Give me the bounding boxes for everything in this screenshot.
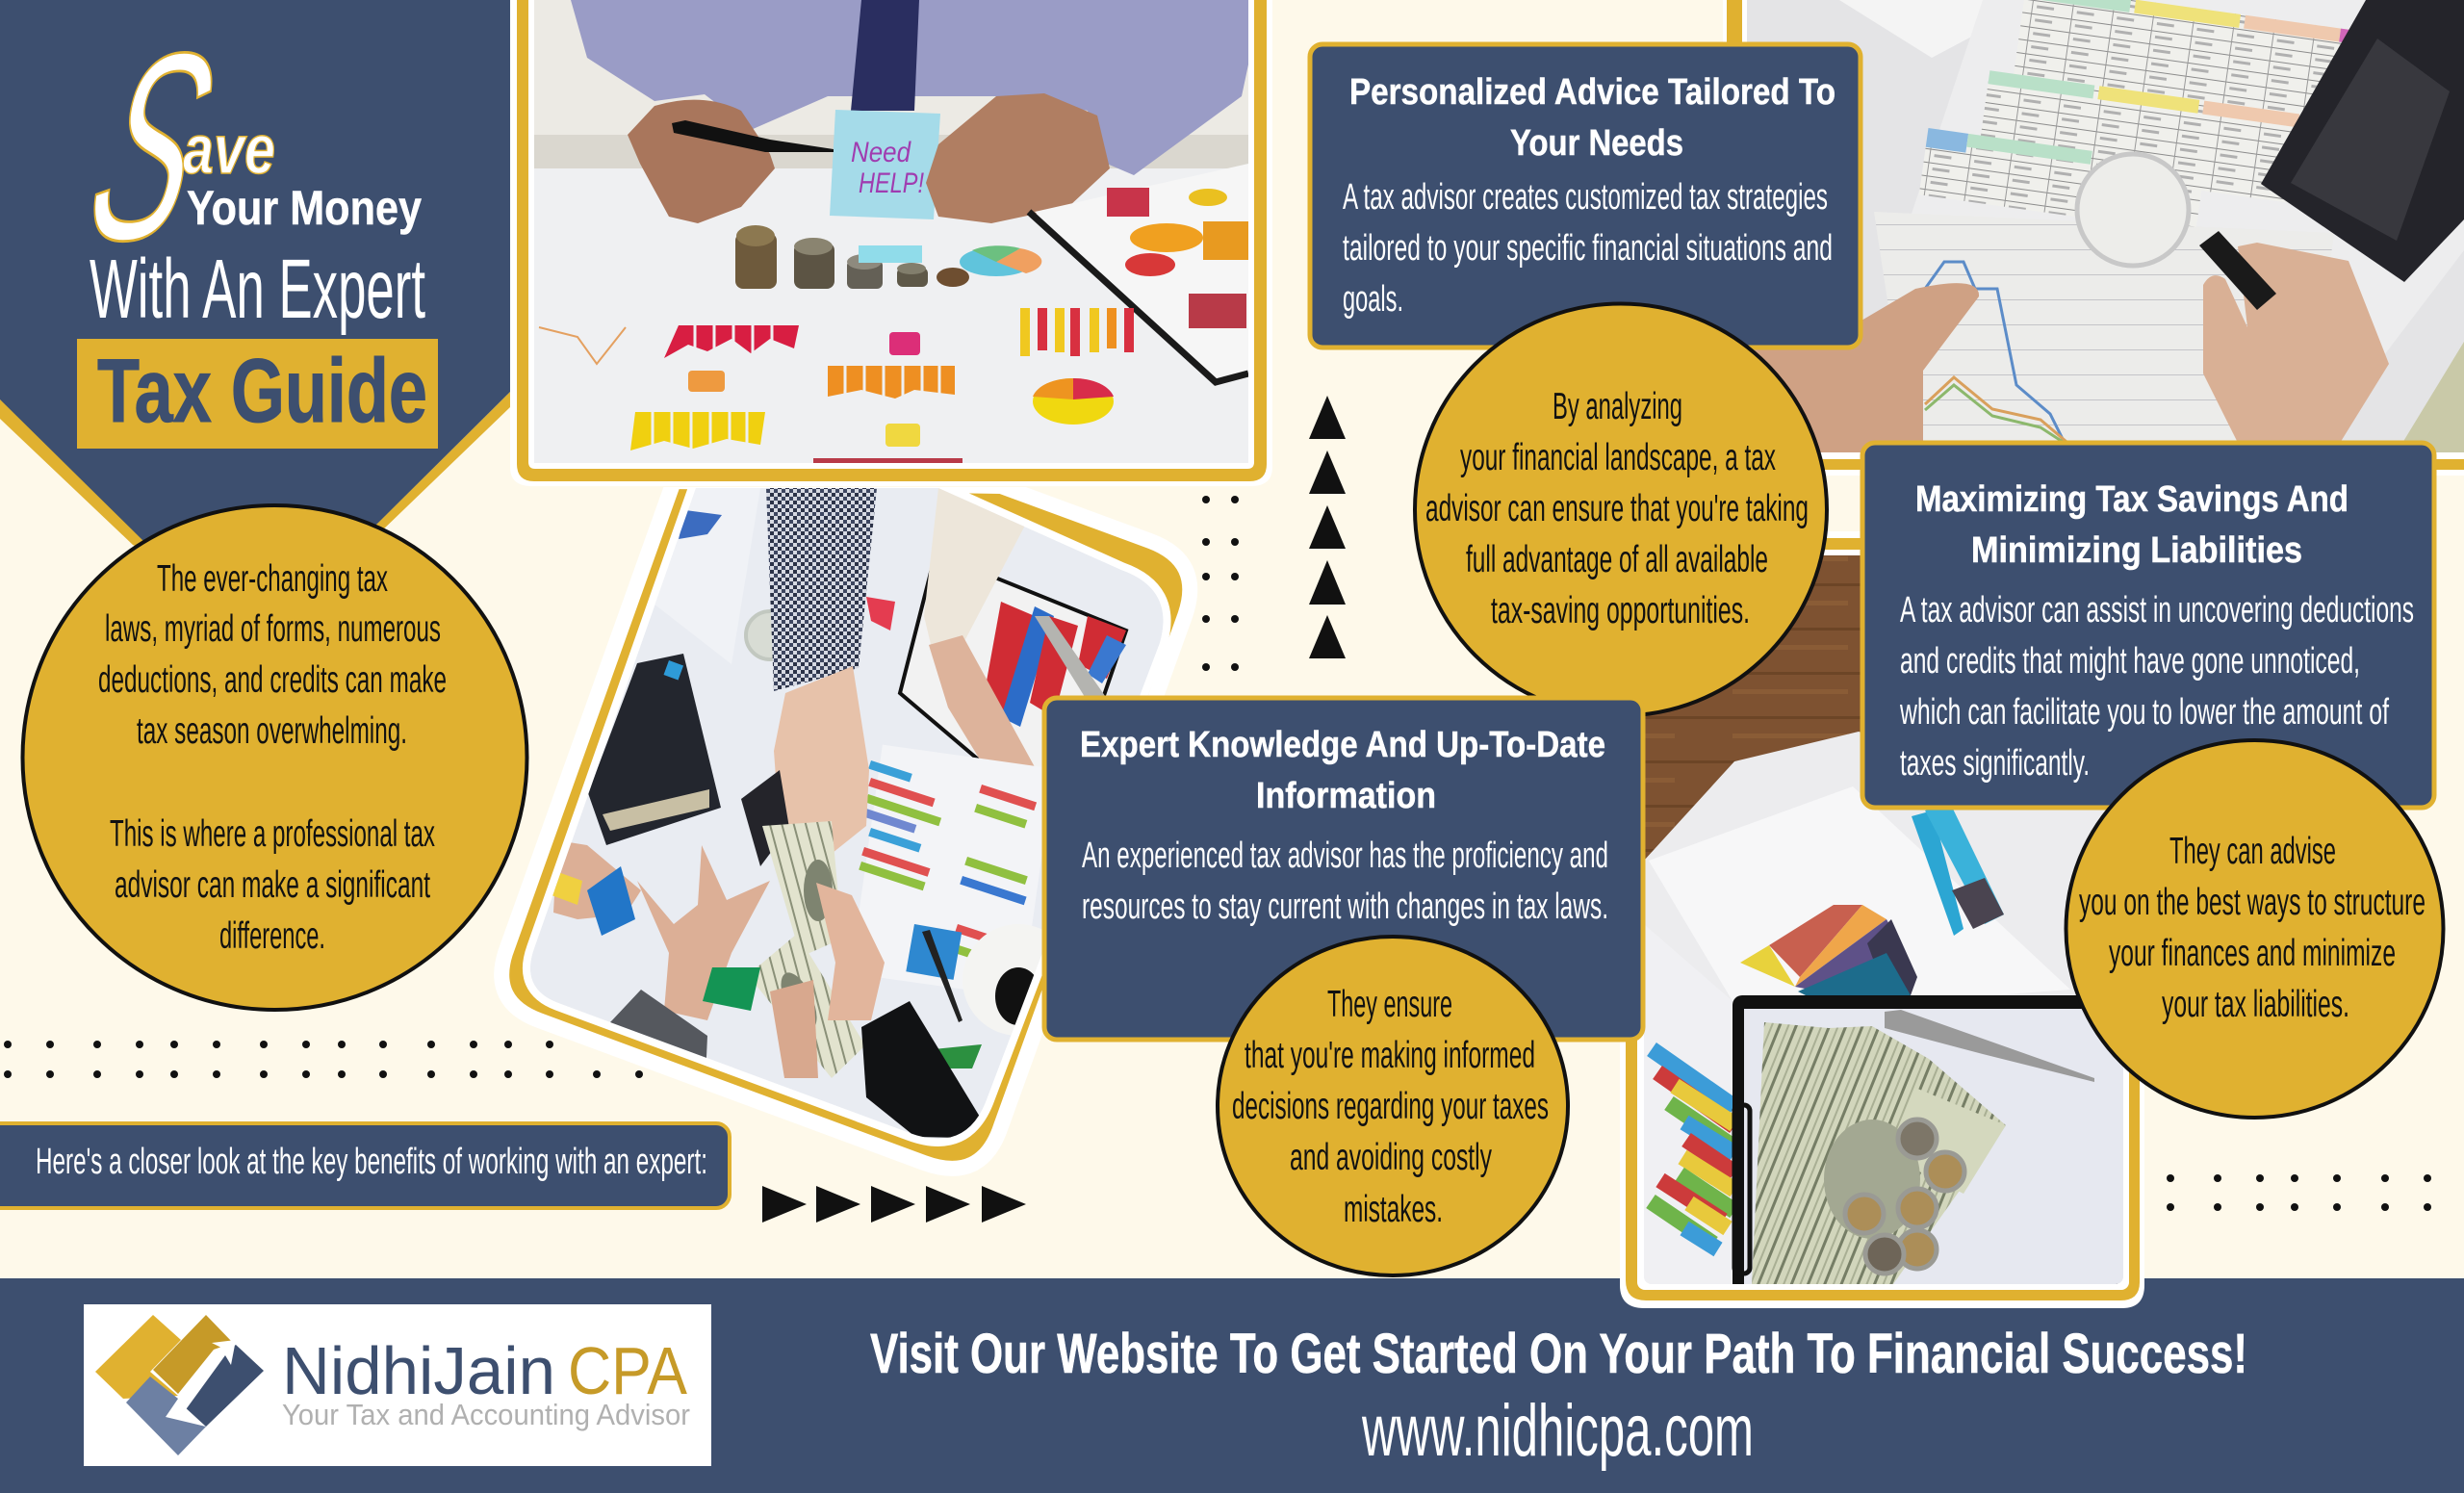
circle text: your financial landscape, a tax [1460, 437, 1776, 478]
header panel [0, 0, 510, 626]
coins [1845, 1120, 1964, 1274]
circle text: tax-saving opportunities. [1491, 590, 1750, 631]
cyan bars [1912, 803, 2004, 936]
circle text: decisions regarding your taxes [1232, 1086, 1549, 1127]
photo: desk with charts and coins [534, 0, 1248, 466]
arrows pointing up [1309, 396, 1346, 658]
lead-in banner: Here's a closer look at the key benefits of working with an expert: [36, 1142, 707, 1182]
heading: Information [1256, 776, 1436, 816]
headline: With An Expert: With An Expert [90, 243, 425, 336]
yellow red columns [1020, 308, 1134, 356]
right hand [2203, 243, 2389, 452]
body text: A tax advisor creates customized tax strategies [1343, 177, 1828, 218]
intro text: The ever-changing tax [157, 558, 388, 600]
intro text: laws, myriad of forms, numerous [105, 608, 441, 650]
banknotes [2404, 342, 2464, 452]
small pies [1125, 189, 1227, 276]
clipboard edge [1029, 212, 1248, 382]
body text [1082, 836, 1608, 927]
intro text: This is where a professional tax [110, 813, 435, 855]
bar chart paper [850, 745, 1054, 997]
colored pie [960, 245, 1041, 276]
big pie [1033, 378, 1114, 425]
spreadsheet [1919, 0, 2348, 227]
left hand [1754, 283, 1979, 452]
circle text: They ensure [1327, 984, 1452, 1025]
shirt [571, 0, 1248, 175]
chart board [900, 553, 1126, 828]
pen black [922, 930, 962, 1022]
body text: goals. [1343, 279, 1403, 320]
red paper [866, 597, 895, 631]
logo mark [95, 1315, 264, 1455]
heading: Personalized Advice Tailored To [1349, 72, 1835, 113]
black sleeve [861, 1001, 986, 1138]
red blue chart [982, 602, 1126, 727]
circle: informed decisions [1218, 937, 1568, 1275]
right hand [926, 93, 1110, 223]
body text [1899, 590, 2414, 784]
glass [746, 611, 794, 659]
orange bar chart [828, 366, 955, 399]
calculator [588, 654, 721, 845]
body text: tailored to your specific financial situations and [1343, 228, 1833, 269]
intro text: difference. [219, 915, 325, 957]
logo tagline: Your Tax and Accounting Advisor [282, 1398, 690, 1431]
decorative dots: lower left [4, 1041, 643, 1078]
circle text: and avoiding costly [1290, 1137, 1492, 1178]
circle text: your tax liabilities. [2162, 984, 2349, 1025]
photo frame: papers on wood, bottom right [1620, 531, 2144, 1308]
white sleeve [924, 488, 1028, 664]
heading: Minimizing Liabilities [1971, 530, 2302, 571]
circle text: mistakes. [1344, 1189, 1443, 1230]
right hand [929, 635, 1044, 809]
pie chart [1740, 905, 1917, 997]
circle: financial landscape [1415, 304, 1827, 716]
photo frame: rotated team with money and calculator [501, 481, 1190, 1169]
left hand [628, 100, 775, 223]
coffee [962, 924, 1074, 1036]
tie [851, 0, 919, 111]
body text: taxes significantly. [1900, 743, 2090, 784]
body text: resources to stay current with changes in tax laws. [1082, 887, 1608, 927]
heading: Your Needs [1510, 123, 1683, 164]
line graph sheet [1876, 224, 2332, 425]
coin stacks [735, 225, 969, 289]
script letters ave: ave [183, 112, 275, 189]
photo frame: calculator and charts, top right [1723, 0, 2464, 476]
circle text: advisor can ensure that you're taking [1425, 488, 1809, 529]
circle text [2079, 831, 2426, 1025]
note text: Need [851, 137, 911, 168]
cyan bars [859, 245, 922, 263]
body text [1343, 177, 1833, 320]
green labels [703, 967, 760, 1011]
photo frame: businessman with Need Help note, top centre [510, 0, 1272, 486]
logo name: NidhiJain [282, 1333, 555, 1408]
calculator [2261, 0, 2464, 282]
circle text [1425, 386, 1809, 631]
panel: personalized advice [1310, 44, 1861, 348]
circle text: They can advise [2169, 831, 2336, 872]
script letter S: S [66, 0, 236, 296]
heading [1080, 725, 1605, 816]
photo: hands exchanging cash [530, 488, 1164, 1139]
circle text: By analyzing [1553, 386, 1682, 427]
logo card [84, 1304, 711, 1466]
red bar chart [664, 325, 799, 358]
arrows pointing right [762, 1186, 1026, 1223]
lead-in banner [0, 1123, 730, 1208]
photo: spreadsheet, magnifier and hands [1747, 0, 2464, 452]
heading [1349, 72, 1835, 164]
body text: An experienced tax advisor has the proficiency and [1082, 836, 1608, 876]
panel: expert knowledge [1044, 698, 1643, 1040]
circle: minimize liabilities [2066, 740, 2443, 1118]
logo CPA: CPA [568, 1333, 687, 1408]
phone [741, 770, 789, 866]
footer band [0, 1278, 2464, 1493]
checked sleeve [766, 488, 877, 691]
bars right [1107, 188, 1248, 328]
pen [1885, 1010, 2094, 1082]
photo: pie chart, clipboard and dollars [1644, 555, 2129, 1303]
circle text: full advantage of all available [1466, 539, 1768, 580]
intro circle [23, 505, 527, 1010]
intro text: tax season overwhelming. [137, 710, 407, 752]
headline: Your Money: Your Money [187, 181, 422, 235]
intro text: advisor can make a significant [115, 864, 430, 906]
pen [672, 120, 834, 152]
note text line two: HELP! [859, 167, 925, 199]
top table sheet [645, 488, 760, 664]
magnifier [2077, 154, 2189, 266]
color bars [1651, 1049, 1734, 1249]
intro text: deductions, and credits can make [98, 659, 447, 701]
circle text [1232, 984, 1549, 1230]
left pie hand [553, 840, 641, 919]
circle text: that you're making informed [1245, 1035, 1535, 1076]
headline badge: Tax Guide: Tax Guide [97, 340, 427, 441]
ruler [1035, 616, 1116, 717]
white sheet right [1035, 164, 1248, 214]
yellow bar chart [630, 412, 765, 450]
dollars [1752, 1022, 2006, 1284]
heading [1915, 479, 2348, 571]
intro text [98, 558, 447, 957]
heading: Maximizing Tax Savings And [1915, 479, 2348, 520]
banknote stack one [762, 821, 842, 957]
lower hands [637, 845, 770, 1020]
banknote stack two [748, 934, 865, 1078]
decorative dots: lower right [2167, 1174, 2431, 1211]
decorative dots: centre vertical [1202, 496, 1239, 671]
dark grey sleeve [610, 990, 707, 1078]
clipboard clip [1734, 1105, 1750, 1274]
footer website: www.nidhicpa.com [1361, 1390, 1754, 1472]
note [830, 110, 940, 219]
panel: maximizing tax savings [1862, 443, 2434, 808]
giving hand [774, 666, 869, 857]
heading: Expert Knowledge And Up-To-Date [1080, 725, 1605, 765]
clipboard [1732, 995, 2118, 1303]
